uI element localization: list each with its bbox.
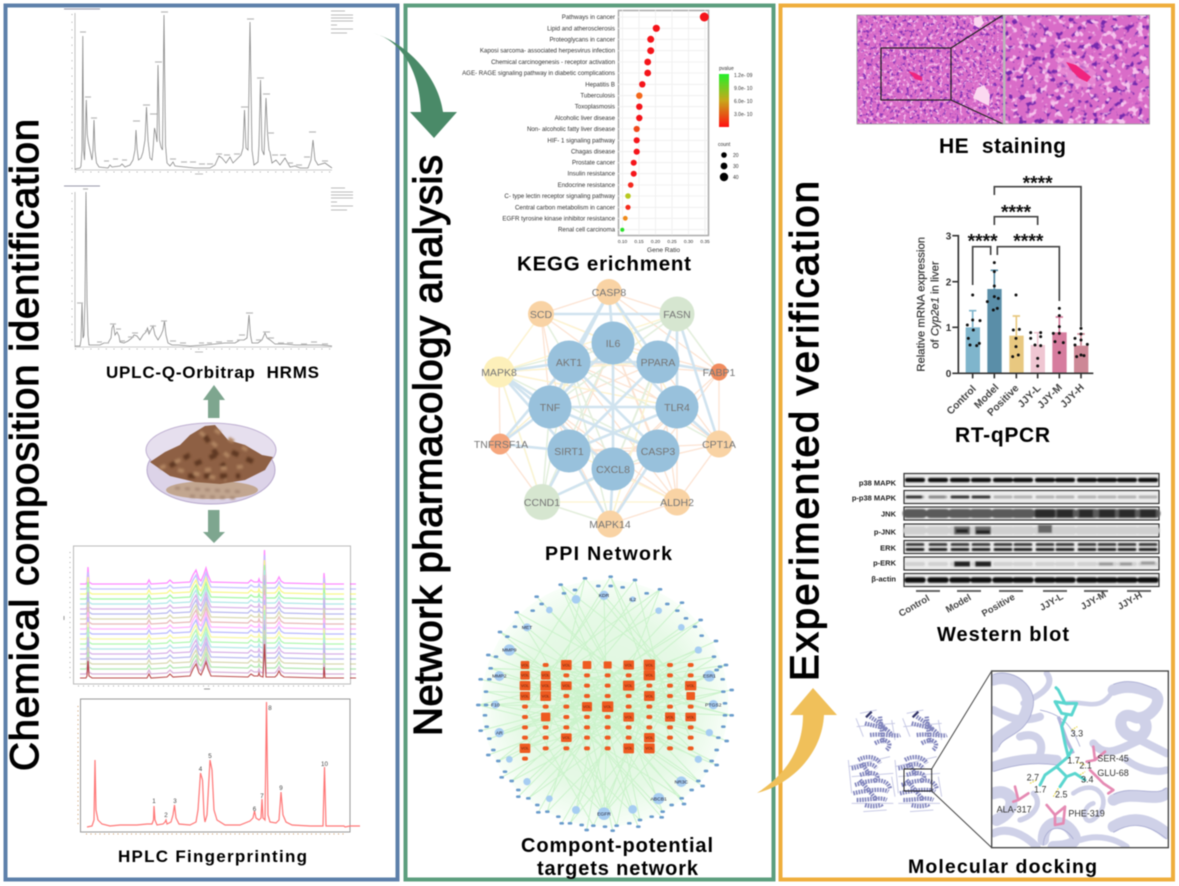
legend: count dot sizes: count [718, 142, 731, 148]
image: western blot: p-JNK [874, 528, 897, 536]
label: HE staining: HE staining [939, 135, 1066, 158]
chart: KEGG enrichment dot plot: HIF- 1 signaling pathway [547, 137, 616, 144]
image: western blot: JJY-M [1079, 589, 1108, 613]
chart: PPI network: MAPK8 [481, 367, 517, 379]
chart: PPI network: TLR4 [664, 402, 690, 414]
compound nodes: VOL [521, 746, 530, 751]
chart: RT-qPCR bar chart of Cyp2e1 expression: JJY-L [1016, 383, 1043, 410]
compound nodes: VOL [583, 704, 592, 709]
compound nodes: VOL [521, 662, 530, 667]
compound nodes: VOL [645, 693, 654, 698]
chart: KEGG enrichment dot plot: Kaposi sarcoma- associated herpesvirus infection [480, 48, 616, 55]
compound nodes: VOL [521, 693, 530, 698]
label: Compont-potential targets network: Compont-potential [521, 835, 713, 857]
chart: reference HPLC fingerprint with numbered peaks: 1 [152, 798, 156, 805]
chart: reference HPLC fingerprint with numbered peaks [78, 699, 360, 834]
label: PPI Network: PPI Network [545, 543, 672, 565]
target gene nodes: MMP9 [502, 648, 517, 654]
target gene nodes: NR3C [675, 779, 689, 785]
chart: KEGG enrichment dot plot: Gene Ratio [647, 247, 680, 254]
chart: PPI network: CXCL8 [596, 464, 630, 476]
chart: PPI network: PPARA [641, 357, 675, 369]
chart: KEGG enrichment dot plot: Alcoholic liver disease [555, 115, 616, 122]
panel: network pharmacology analysis [406, 6, 774, 880]
chart: KEGG enrichment dot plot: Insulin resistance [568, 171, 616, 178]
chart: reference HPLC fingerprint with numbered peaks: 5 [208, 753, 212, 760]
compound nodes: VOL [604, 704, 612, 709]
chart: KEGG enrichment dot plot: Renal cell carcinoma [558, 227, 616, 234]
chart: overlaid HPLC fingerprints [64, 546, 356, 689]
legend: pvalue colour scale: pvalue [719, 66, 734, 72]
compound nodes: VOL [625, 683, 633, 688]
chart: RT-qPCR bar chart of Cyp2e1 expression: Control [945, 384, 979, 417]
compound nodes: VOL [542, 683, 550, 688]
compound nodes: VOL [625, 746, 633, 751]
chart: component-potential targets network [477, 577, 733, 831]
label: KEGG erichment: KEGG erichment [517, 252, 691, 276]
image: western blot: p-ERK [873, 558, 897, 568]
image: molecular docking with protein and ligand inset: 3.3 [1071, 729, 1083, 739]
chart: RT-qPCR bar chart of Cyp2e1 expression [915, 173, 1093, 419]
legend: pvalue colour scale: 1.2e- 09 [734, 73, 753, 79]
legend: pvalue colour scale: 9.0e- 10 [734, 86, 753, 92]
chart: RT-qPCR bar chart of Cyp2e1 expression: JJY-M [1036, 382, 1065, 411]
chart: KEGG enrichment dot plot: 0.25 [667, 239, 677, 245]
label: UPLC-Q-Orbitrap HRMS: UPLC-Q-Orbitrap HRMS [106, 363, 319, 382]
compound nodes: VOL [645, 673, 654, 678]
legend: count dot sizes: 20 [733, 153, 739, 159]
image: western blot: β-actin [871, 574, 896, 584]
target gene nodes: EGFR [597, 811, 611, 817]
image: western blot: JNK [881, 510, 897, 518]
chart: reference HPLC fingerprint with numbered peaks: 4 [199, 766, 203, 773]
compound nodes: VOL [521, 673, 530, 678]
image: western blot: Control [897, 593, 932, 620]
arrow: up from sample to UPLC [203, 385, 225, 418]
compound nodes: VOL [625, 662, 633, 667]
chart: RT-qPCR bar chart of Cyp2e1 expression: **** [1013, 232, 1044, 253]
chart: RT-qPCR bar chart of Cyp2e1 expression: **** [968, 232, 998, 253]
chart: KEGG enrichment dot plot: 0.15 [634, 239, 644, 245]
chart: UPLC chromatogram one [64, 9, 353, 174]
chart: RT-qPCR bar chart of Cyp2e1 expression: Positive [986, 383, 1022, 419]
chart: KEGG enrichment dot plot: Hepatitis B [585, 81, 615, 88]
target gene nodes: PTGS2 [705, 702, 722, 708]
compound nodes: VOL [562, 662, 571, 667]
chart: RT-qPCR bar chart of Cyp2e1 expression: 3 [946, 231, 952, 242]
compound nodes: VOL [542, 673, 550, 678]
chart: PPI network: ALDH2 [660, 497, 694, 509]
compound nodes: VOL [562, 735, 571, 740]
arrow: green curved arrow from composition to network analysis [373, 33, 457, 138]
chart: PPI network: TNFRSF1A [474, 439, 528, 451]
chart: PPI network: FABP1 [703, 367, 736, 379]
image: molecular docking with protein and ligand inset [848, 671, 1168, 848]
image: western blot: JJY-L [1038, 591, 1066, 614]
image: molecular docking with protein and ligand inset: 2.7 [1027, 773, 1039, 783]
image: molecular docking with protein and ligand inset: GLU-68 [1097, 768, 1129, 778]
chart: reference HPLC fingerprint with numbered peaks: 7 [260, 793, 264, 800]
target gene nodes [477, 577, 733, 831]
chart: KEGG enrichment dot plot: 0.10 [618, 239, 627, 245]
chart: KEGG enrichment dot plot: Prostate cancer [572, 160, 615, 167]
chart: PPI network: IL6 [606, 338, 620, 350]
image: molecular docking with protein and ligand inset: ALA-317 [997, 805, 1032, 815]
image: molecular docking with protein and ligand inset: PHE-319 [1068, 809, 1105, 819]
image: western blot: p-p38 MAPK [852, 494, 897, 502]
icon: petri dish with powder [146, 423, 276, 504]
chart: KEGG enrichment dot plot: 0.20 [651, 239, 660, 245]
image: molecular docking with protein and ligand inset: 2.5 [1055, 790, 1067, 800]
chart: RT-qPCR bar chart of Cyp2e1 expression: **** [1023, 173, 1053, 194]
central hub nodes [528, 322, 698, 490]
label: Western blot: Western blot [937, 624, 1069, 646]
compound nodes: VOL [625, 714, 633, 719]
legend: pvalue colour scale [719, 66, 753, 127]
heading: chemical composition identification: Chemical composition identification [3, 119, 47, 771]
image: molecular docking with protein and ligand inset: 3.4 [1081, 775, 1093, 785]
chart: RT-qPCR bar chart of Cyp2e1 expression: of Cyp2e1 in liver [930, 261, 942, 349]
compound nodes: VOL [645, 746, 654, 751]
chart: KEGG enrichment dot plot: Lipid and atherosclerosis [547, 25, 615, 32]
chart: KEGG enrichment dot plot: Pathways in cancer [562, 14, 615, 21]
chart: KEGG enrichment dot plot [462, 10, 753, 254]
target gene nodes: ESR1 [703, 674, 716, 680]
chart: KEGG enrichment dot plot: Chagas disease [571, 149, 616, 156]
chart: reference HPLC fingerprint with numbered peaks: 3 [173, 798, 177, 805]
chart: RT-qPCR bar chart of Cyp2e1 expression: **** [1001, 203, 1032, 224]
label: RT-qPCR: RT-qPCR [955, 424, 1050, 447]
chart: RT-qPCR bar chart of Cyp2e1 expression: 1 [946, 323, 952, 334]
chart: UPLC chromatogram two [64, 186, 353, 352]
target gene nodes: ABCB1 [650, 796, 667, 802]
chart: PPI network [474, 279, 736, 538]
chart: KEGG enrichment dot plot: Toxoplasmosis [575, 104, 615, 111]
image: molecular docking with protein and ligand inset: 2.1 [1079, 760, 1092, 770]
chart: KEGG enrichment dot plot: Central carbon metabolism in cancer [515, 204, 615, 211]
image: molecular docking with protein and ligand inset: 1.7 [1067, 755, 1080, 765]
panel: experimented verification [780, 6, 1173, 880]
legend: count dot sizes: 40 [733, 175, 739, 181]
chart: KEGG enrichment dot plot: EGFR tyrosine kinase inhibitor resistance [502, 215, 616, 222]
legend: pvalue colour scale: 6.0e- 10 [734, 99, 753, 105]
chart: KEGG enrichment dot plot: Non- alcoholic fatty liver disease [527, 126, 616, 133]
chart: RT-qPCR bar chart of Cyp2e1 expression: JJY-H [1059, 382, 1087, 410]
chart: reference HPLC fingerprint with numbered peaks: 8 [268, 705, 272, 712]
chart: PPI network: SIRT1 [554, 446, 584, 458]
chart: reference HPLC fingerprint with numbered peaks: 10 [321, 761, 328, 768]
arrow: yellow curved arrow from network analysis to verification [757, 688, 837, 793]
compound nodes: VOL [562, 683, 571, 688]
compound nodes: VOL [521, 683, 530, 688]
image: molecular docking with protein and ligand inset: SER-45 [1097, 754, 1129, 764]
chart: reference HPLC fingerprint with numbered peaks: 6 [253, 806, 257, 813]
compound nodes: VOL [666, 714, 675, 719]
target gene nodes: F10 [491, 702, 500, 708]
legend: pvalue colour scale: 3.0e- 10 [734, 112, 753, 118]
compound nodes [520, 660, 696, 759]
chart: PPI network: SCD [530, 309, 553, 321]
chart: PPI network: CASP3 [641, 446, 675, 458]
compound nodes: VOL [687, 683, 695, 688]
compound nodes: VOL [542, 693, 550, 698]
chart: KEGG enrichment dot plot: 0.35 [700, 239, 710, 245]
panel: chemical composition identification [3, 6, 398, 880]
label: Compont-potential targets network [521, 835, 713, 880]
target gene nodes: MMP2 [492, 674, 507, 680]
image: western blot [852, 474, 1159, 620]
compound nodes: VOL [645, 735, 654, 740]
image: western blot: Positive [980, 592, 1017, 620]
label: Molecular docking: Molecular docking [908, 856, 1097, 878]
chart: KEGG enrichment dot plot: Proteoglycans in cancer [549, 36, 615, 43]
chart: reference HPLC fingerprint with numbered peaks: 2 [164, 812, 168, 819]
image: western blot: p38 MAPK [859, 478, 897, 488]
target gene nodes: KDR [599, 593, 610, 599]
chart: KEGG enrichment dot plot: AGE- RAGE signaling pathway in diabetic complications [462, 70, 615, 77]
chart: reference HPLC fingerprint with numbered peaks: 9 [279, 785, 283, 792]
chart: KEGG enrichment dot plot: Chemical carcinogenesis - receptor activation [491, 59, 616, 66]
image: western blot: Model [944, 592, 973, 616]
chart: PPI network: AKT1 [556, 357, 582, 369]
image: western blot: ERK [880, 544, 897, 552]
label: Compont-potential targets network: targets network [537, 858, 699, 880]
chart: RT-qPCR bar chart of Cyp2e1 expression: 0 [946, 369, 952, 380]
image: HE stained liver section with magnified inset [857, 15, 1150, 124]
heading: network pharmacology analysis: Network pharmacology analysis [406, 155, 450, 736]
image: western blot: JJY-H [1116, 590, 1144, 613]
chart: PPI network: CCND1 [524, 497, 560, 509]
chart: PPI network: FASN [663, 309, 691, 321]
chart: RT-qPCR bar chart of Cyp2e1 expression: 2 [946, 277, 952, 288]
chart: RT-qPCR bar chart of Cyp2e1 expression: Model [973, 382, 1002, 411]
chart: PPI network: MAPK14 [589, 519, 631, 531]
compound nodes: VOL [645, 662, 654, 667]
arrow: down from sample to HPLC [203, 510, 225, 543]
legend: count dot sizes: 30 [733, 164, 739, 170]
target gene nodes: IL2 [629, 597, 636, 603]
heading: experimented verification: Experimented verification [783, 181, 827, 681]
outer hub nodes [484, 279, 732, 538]
chart: PPI network: TNF [540, 402, 560, 414]
compound nodes: VOL [687, 714, 695, 719]
chart: RT-qPCR bar chart of Cyp2e1 expression: Relative mRNA expression [915, 237, 927, 372]
label: HPLC Fingerprinting: HPLC Fingerprinting [118, 847, 307, 866]
chart: KEGG enrichment dot plot: C- type lectin receptor signaling pathway [504, 193, 616, 200]
chart: PPI network: CASP8 [592, 287, 626, 299]
legend: count dot sizes [718, 142, 739, 181]
chart: KEGG enrichment dot plot: Tuberculosis [580, 93, 615, 100]
chart: KEGG enrichment dot plot: Endocrine resistance [558, 182, 616, 189]
target gene nodes: AR [496, 730, 503, 736]
image: molecular docking with protein and ligand inset: 1.7 [1034, 785, 1046, 795]
chart: KEGG enrichment dot plot: 0.30 [684, 239, 693, 245]
target gene nodes: MET [522, 625, 532, 631]
chart: PPI network: CPT1A [702, 439, 736, 451]
